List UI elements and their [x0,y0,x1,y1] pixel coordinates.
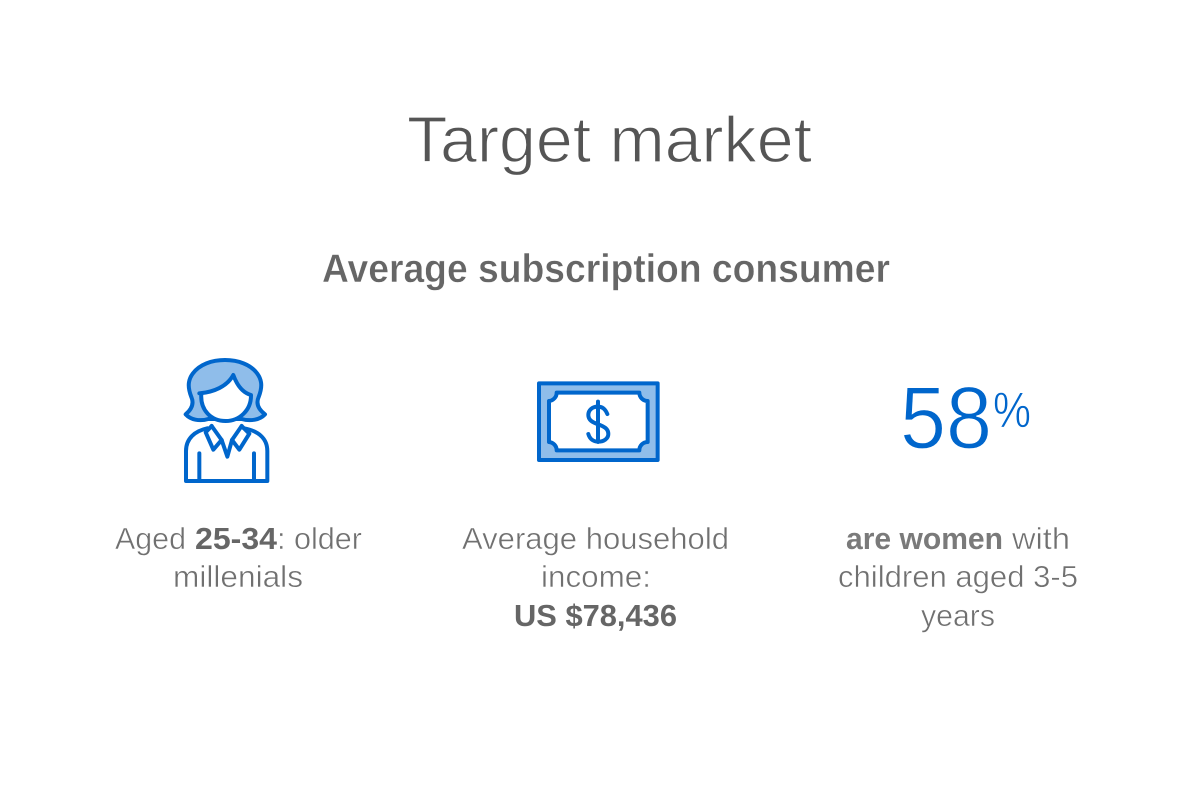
text: age: 25-34 [195,521,278,556]
text: income: US $78,436 [514,598,677,633]
statistic: 58 percent: 58 [900,368,992,467]
icon: banknote [539,383,658,460]
hair [186,360,265,420]
collar [206,426,249,457]
text: age: : older [277,521,362,556]
body [186,428,267,481]
text: women [838,521,1078,633]
text: age: millenials [173,559,303,594]
subtitle: Average subscription consumer [322,247,890,291]
text: women: with [1011,521,1070,556]
text: income: Average household [462,521,729,556]
face [199,375,251,421]
text: women: are women [846,521,1003,556]
icon: woman [186,360,267,481]
title: Target market [407,103,812,176]
statistic: 58 percent: % [993,382,1031,438]
text: age [115,521,362,594]
dollar sign [588,402,608,442]
text: women: years [921,598,995,633]
note inner panel [549,393,648,450]
text: income [462,521,729,633]
text: women: children aged 3-5 [838,559,1078,594]
text: income: income: [541,559,651,594]
note background [539,383,658,460]
text: age: Aged [115,521,186,556]
